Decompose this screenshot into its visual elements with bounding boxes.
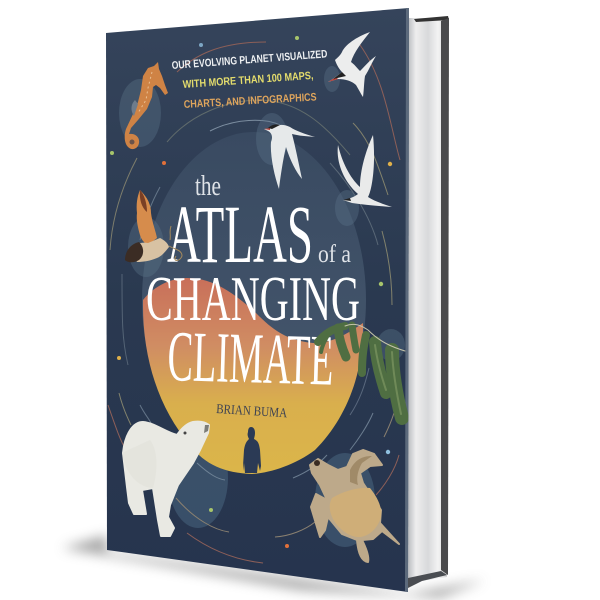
blue circle <box>142 132 366 343</box>
icon: tern middle <box>264 124 315 189</box>
lower halo discs <box>172 453 375 547</box>
book pages <box>408 16 449 588</box>
icon: seahorse <box>125 62 168 149</box>
tagline line 3: CHARTS, AND INFOGRAPHICS <box>183 91 317 111</box>
tagline <box>171 48 328 111</box>
tagline line 1: OUR EVOLVING PLANET VISUALIZED <box>171 48 328 72</box>
icon: tern top right <box>328 32 376 97</box>
icon: sea turtle <box>310 450 399 562</box>
cover spine edge <box>405 8 409 592</box>
title <box>146 171 360 401</box>
orbit lines <box>108 42 400 563</box>
icon: tern lower right <box>338 135 392 207</box>
ATLAS: ATLAS <box>167 188 313 280</box>
the: the <box>195 171 221 202</box>
cover artwork <box>108 32 405 563</box>
CLIMATE: CLIMATE <box>167 316 335 401</box>
book cover <box>106 8 409 592</box>
CHANGING: CHANGING <box>146 263 360 334</box>
tagline line 2: WITH MORE THAN 100 MAPS, <box>182 70 314 91</box>
upper halo discs <box>119 66 405 361</box>
author: BRIAN BUMA <box>216 401 288 420</box>
of a: of a <box>318 241 351 268</box>
icon: moth <box>125 190 182 262</box>
icon: polar bear <box>122 422 209 536</box>
sunset shape <box>143 278 363 474</box>
book illustration <box>64 8 478 600</box>
icon: human silhouette <box>243 427 261 473</box>
icon: evergreen branch <box>318 324 405 418</box>
ground shadow <box>62 535 485 598</box>
coloured dots <box>110 36 392 548</box>
